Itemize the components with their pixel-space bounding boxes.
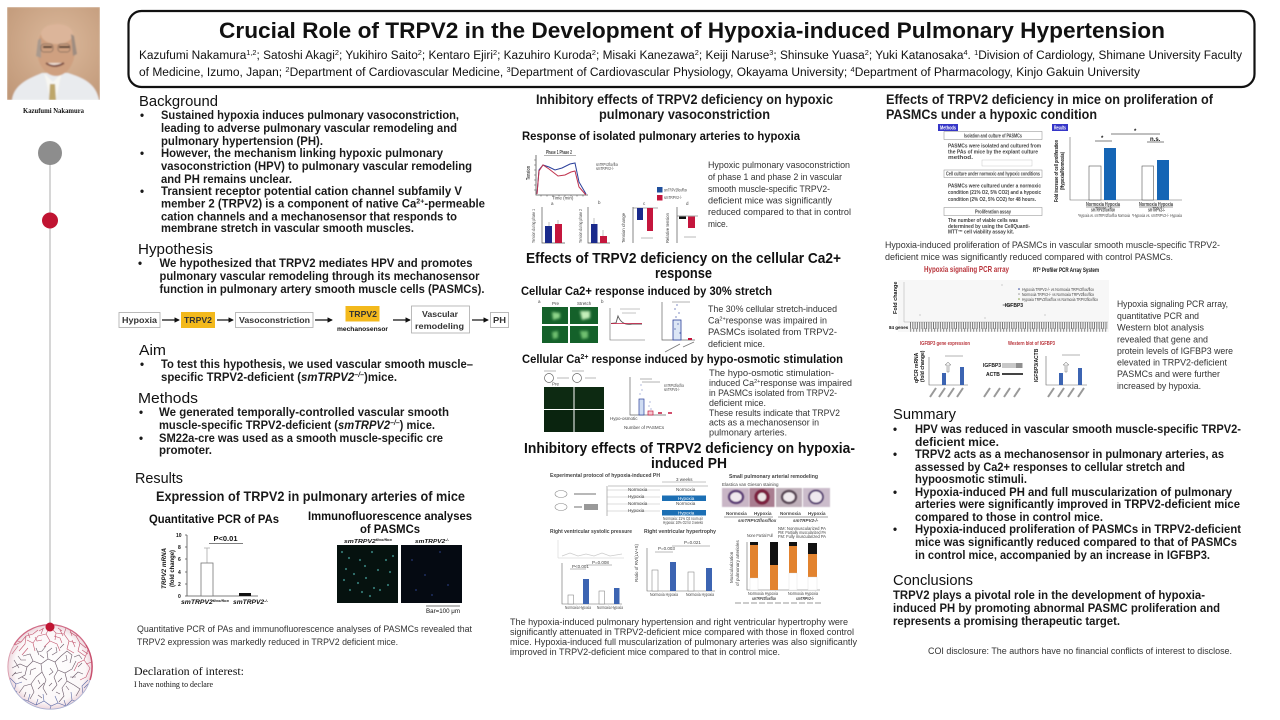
micrographs: small pulmonary arterial remodeling	[722, 474, 830, 523]
bar chart: right ventricular systolic pressure: Right ventricular systolic pressure	[550, 529, 632, 535]
experimental protocol: Experimental protocol of hypoxia-induced PH	[550, 473, 660, 479]
timeline line	[49, 160, 51, 626]
heading: response	[655, 265, 712, 282]
aim text: To test this hypothesis, we used vascular smooth muscle–	[161, 358, 474, 371]
experimental protocol: Hypoxia	[678, 510, 695, 516]
bar chart: TRPV2 mRNA: 10	[176, 533, 182, 539]
summary bullets: hypoosmotic stimuli.	[915, 473, 1027, 486]
heading: results: Results	[135, 470, 183, 487]
methods box: PASMCs were isolated and cultured from	[948, 144, 1042, 150]
summary bullets: deficient mice.	[915, 436, 999, 449]
methods box: Proliferation assay	[975, 210, 1011, 216]
hypothesis text: We hypothesized that TRPV2 mediates HPV and promotes	[160, 257, 472, 270]
methods text: We generated temporally-controlled vascular smooth	[159, 406, 449, 419]
bar chart: TRPV2 mRNA: TRPV2 mRNA	[161, 548, 168, 589]
panel: effects on the cellular Ca2+ response	[521, 250, 852, 438]
bar chart: hypo-osmotic: Hypo-osmotic	[610, 416, 638, 421]
description: hypo-osmotic: in PASMCs isolated from TRPV2-	[709, 387, 837, 398]
bar chart: proliferation: smTRPV2flox/flox	[1091, 208, 1115, 214]
panel: background	[139, 93, 486, 235]
flow diagram: hypoxia to PH: Vascular	[422, 309, 459, 319]
methods box: Methods	[940, 126, 956, 132]
heading: Effects of TRPV2 deficiency on the cellular Ca2+	[526, 250, 841, 267]
panel: effects on proliferation of PASMCs	[885, 92, 1220, 262]
heading: Inhibitory effects of TRPV2 deficiency on hypoxia-	[524, 440, 855, 457]
summary bullets: TRPV2 acts as a mechanosensor in pulmonary arteries, as	[915, 448, 1224, 461]
western blot of IGFBP3: ACTB	[986, 372, 1000, 378]
PCR array plot	[889, 280, 1109, 332]
bar chart: proliferation	[1052, 124, 1182, 218]
summary bullets: in control mice, accompanied by an increase in IGFBP3.	[915, 549, 1210, 562]
micrographs: small pulmonary arterial remodeling: Hypoxia	[808, 511, 826, 516]
background bullets: •	[140, 147, 144, 160]
bar chart: right ventricular hypertrophy: Right ventricular hypertrophy	[644, 529, 716, 535]
bar chart: TRPV2 mRNA: 0	[178, 594, 181, 600]
illustration: pulmonary vascular sphere	[8, 622, 92, 709]
subheading: expression: Expression of TRPV2 in pulmonary arteries of mice	[156, 489, 465, 504]
methods text: SM22a-cre was used as a smooth muscle-specific cre	[159, 432, 444, 445]
background bullets: vasoconstriction (HPV) to pulmonary vascular remodeling	[161, 160, 472, 173]
aim text: •	[140, 358, 144, 371]
summary bullets: arteries were significantly improved in TRPV2-deficient mice	[915, 498, 1241, 511]
flow diagram: hypoxia to PH: Hypoxia	[122, 315, 157, 325]
legend	[657, 187, 687, 200]
stacked bar chart: muscularization: smTRPV2-/-	[796, 596, 814, 601]
summary bullets: assessed by Ca2+ responses to cellular stretch and	[915, 461, 1185, 474]
description: hypo-osmotic: deficient mice.	[709, 397, 766, 408]
legend: smTRPV2-/-	[664, 195, 682, 200]
experimental protocol: Hypoxia	[628, 494, 645, 499]
description: protein levels of IGFBP3 were	[1117, 345, 1233, 356]
bar chart: IGFBP3 protein: IGFBP3/ACTB	[1034, 348, 1040, 382]
line chart: stretch trace	[601, 299, 645, 340]
heading: background: Background	[139, 93, 218, 110]
declaration of interest: Declaration of interest:	[134, 664, 244, 678]
methods box: The number of viable cells was	[948, 218, 1018, 224]
western blot of IGFBP3: Western blot of IGFBP3	[1008, 341, 1055, 347]
bar chart: TRPV2 mRNA: 4	[178, 570, 181, 576]
heading: pulmonary vasoconstriction	[599, 107, 770, 122]
summary bullets: HPV was reduced in vascular smooth muscle-specific TRPV2-	[915, 423, 1241, 436]
bar chart: right ventricular hypertrophy: Normoxia Hypoxia	[650, 592, 678, 597]
bar chart: IGFBP3 gene expression: (fold change)	[920, 350, 926, 382]
description: Western blot analysis	[1117, 322, 1204, 332]
description: of phase 1 and phase 2 in vascular	[708, 171, 842, 182]
line chart: vessel tension: Time (min)	[552, 196, 574, 200]
caption: mice. Hypoxia-induced full muscularization of pulmonary arteries was also significantly	[510, 636, 857, 647]
description: hypo-osmotic	[709, 367, 852, 438]
description: stretch	[708, 303, 837, 349]
line chart: vessel tension: smTRPV2flox/flox	[596, 162, 618, 167]
declaration of interest: I have nothing to declare	[134, 679, 213, 689]
authors and affiliations	[139, 49, 1242, 79]
stacked bar chart: muscularization: Normoxia Hypoxia	[788, 591, 818, 596]
methods box: the PAs of mice by the explant culture	[948, 150, 1038, 156]
caption	[510, 616, 857, 657]
methods text	[139, 406, 449, 457]
heading	[526, 250, 841, 282]
authors and affiliations: of Medicine, Izumo, Japan; 2Department of Cardiovascular Medicine, 3Department of Cardiovascular Physiology, Okayama University; 4Department of Pharmacology, Kinjo Gakuin University	[139, 66, 1140, 79]
western blot of IGFBP3: IGFBP3	[983, 363, 1001, 369]
summary bullets: mice was significantly reduced compared to that of PASMCs	[915, 536, 1237, 549]
description: hypo-osmotic: These results indicate that TRPV2	[709, 407, 840, 418]
title banner	[128, 11, 1254, 87]
heading: methods: Methods	[138, 390, 198, 407]
bar chart: right ventricular systolic pressure: P<0.001	[572, 564, 589, 569]
bar charts: phase 1 and phase 2: d	[686, 201, 689, 206]
summary bullets: •	[893, 448, 897, 461]
subheading: immunofluorescence: of PASMCs	[360, 524, 420, 536]
COI disclosure: COI disclosure: The authors have no financial conflicts of interest to disclose.	[928, 645, 1232, 656]
bar chart: proliferation: Normoxia Hypoxia	[1086, 202, 1120, 208]
bar chart: hypo-osmotic: Number of PASMCs	[624, 425, 665, 430]
bar chart: proliferation: *	[1134, 129, 1137, 135]
caption	[885, 239, 1220, 262]
micrographs: small pulmonary arterial remodeling: Normoxia	[780, 511, 801, 516]
bar chart: TRPV2 mRNA: 2	[178, 582, 181, 588]
line chart: vessel tension: Phase 1 Phase 2	[546, 150, 572, 156]
bar chart: right ventricular systolic pressure	[550, 529, 632, 610]
methods box: MTT™ cell viability assay kit.	[948, 230, 1015, 236]
panel: conclusions	[893, 572, 1220, 628]
bar chart: right ventricular hypertrophy: Ratio of RV/(LV+S)	[634, 544, 639, 582]
subheading: stretch: Cellular Ca2+ response induced by 30% stretch	[521, 284, 772, 298]
bar chart: stretch	[662, 302, 695, 352]
bar charts: phase 1 and phase 2: Tension change	[621, 213, 626, 243]
micrographs: small pulmonary arterial remodeling: Small pulmonary arterial remodeling	[729, 474, 818, 480]
bar charts: phase 1 and phase 2	[531, 200, 698, 243]
panel: results, TRPV2 expression	[135, 470, 472, 647]
experimental protocol	[550, 473, 708, 525]
PCR array plot: Fold change	[893, 282, 899, 314]
methods box: method.	[948, 155, 974, 161]
description: stretch: Ca2+response was impaired in	[708, 314, 827, 326]
timeline marker: grey	[38, 141, 62, 165]
experimental protocol: Normoxia	[676, 501, 696, 506]
background bullets: Transient receptor potential cation channel subfamily V	[161, 185, 462, 198]
aim text	[140, 358, 474, 384]
micrographs: small pulmonary arterial remodeling: smTRPV2-/-	[793, 518, 819, 523]
PCR array plot: IGFBP3	[1005, 303, 1023, 309]
description: elevated in TRPV2-deficient	[1117, 356, 1227, 368]
description: smooth muscle-specific TRPV2-	[708, 183, 830, 194]
bar charts: phase 1 and phase 2: Tension during phase 1	[531, 209, 536, 243]
heading	[886, 92, 1213, 122]
line chart: vessel tension: smTRPV2-/-	[596, 166, 614, 171]
line chart: vessel tension: Tension	[526, 166, 532, 180]
summary bullets: •	[893, 523, 897, 536]
caption: improved in TRPV2-deficient mice compared to that in control mice.	[510, 646, 780, 657]
scale bar: Bar=100 μm	[426, 609, 460, 615]
summary bullets: •	[893, 486, 897, 499]
background bullets: cation channels and a mechanosensor that responds to	[161, 210, 457, 224]
experimental protocol: 3 weeks	[676, 477, 693, 482]
authors and affiliations: Kazufumi Nakamura 1,2; Satoshi Akagi 2; Yukihiro Saito 2; Kentaro Ejiri 2; Kazuhiro Kuroda 2; Misaki Kanezawa 2; Keiji Naruse 3; Shinsuke Yuasa 2; Yuki Katanosaka 4. 1Division of Cardiology, Shimane University Faculty	[139, 49, 1242, 62]
bar chart: right ventricular systolic pressure: Normoxia Hypoxia	[565, 605, 591, 610]
methods text: promoter.	[159, 444, 212, 457]
background bullets: •	[140, 185, 144, 198]
caption: Hypoxia-induced proliferation of PASMCs in vascular smooth muscle-specific TRPV2-	[885, 239, 1220, 250]
PCR array plot: Hypoxia TRPV2-/- vs Normoxia TRPV2flox/flox	[1022, 287, 1095, 292]
experimental protocol: Normoxia: 21% O2 room air	[663, 516, 703, 521]
bar chart: hypo-osmotic: smTRPV2flox/flox	[664, 383, 684, 388]
bar chart: hypo-osmotic: smTRPV2-/-	[664, 387, 680, 392]
conclusions text: TRPV2 plays a pivotal role in the development of hypoxia-	[893, 589, 1205, 602]
description: stretch: The 30% cellular stretch-induced	[708, 303, 837, 314]
line chart: vessel tension	[526, 150, 618, 200]
flow diagram: hypoxia to PH: TRPV2	[349, 309, 377, 319]
description: stretch: deficient mice.	[708, 338, 765, 349]
flow diagram: hypoxia to PH: Vasoconstriction	[239, 315, 310, 325]
stacked bar chart: muscularization: Muscularization	[729, 551, 734, 583]
heading: Inhibitory effects of TRPV2 deficiency on hypoxic	[536, 92, 833, 107]
conclusions text	[893, 589, 1220, 628]
caption: expression: Quantitative PCR of PAs and immunofluorescence analyses of PASMCs revealed that	[137, 623, 472, 634]
methods text: •	[139, 406, 143, 419]
stacked bar chart: muscularization: PM: Partially muscularized PA	[778, 530, 826, 535]
subheading: hypo-osmotic: Cellular Ca2+ response induced by hypo-osmotic stimulation	[522, 352, 843, 366]
description: mice.	[708, 218, 728, 229]
fluorescence micrographs: smTRPV2 flox/flox	[344, 538, 393, 545]
experimental protocol: Normoxia	[676, 487, 696, 492]
background bullets	[140, 109, 486, 235]
description: increased by hypoxia.	[1117, 380, 1201, 391]
stacked bar chart: muscularization: FM: Fully muscularized PA	[778, 534, 826, 539]
summary bullets: Hypoxia-induced proliferation of PASMCs in TRPV2-deficient	[915, 523, 1241, 536]
timeline marker: red	[42, 212, 58, 228]
heading	[524, 440, 855, 472]
heading: PASMCs under a hypoxic condition	[886, 107, 1097, 122]
micrographs: stretch	[538, 299, 598, 343]
methods box: Cell culture under normoxic and hypoxic conditions	[946, 172, 1040, 178]
background bullets: However, the mechanism linking hypoxic pulmonary	[161, 147, 444, 160]
description	[1117, 298, 1233, 391]
bar charts: phase 1 and phase 2: c	[643, 201, 646, 206]
bar chart: TRPV2 mRNA: P<0.01	[214, 536, 238, 543]
presenter photo	[7, 7, 100, 100]
methods box: condition (2% O2, 5% CO2) for 48 hours.	[948, 197, 1037, 203]
fluorescence micrographs: smTRPV2 -/-	[415, 538, 450, 545]
description: stretch: PASMCs isolated from TRPV2-	[708, 326, 837, 337]
description: hypo-osmotic: induced Ca2+response was impaired	[709, 377, 852, 388]
western blot of IGFBP3	[983, 341, 1055, 397]
bar chart: TRPV2 mRNA	[161, 533, 269, 606]
bar charts: phase 1 and phase 2: a	[551, 201, 554, 206]
bar chart: IGFBP3 gene expression	[914, 341, 970, 397]
description: hypo-osmotic: pulmonary arteries.	[709, 426, 787, 438]
heading: aim: Aim	[139, 342, 166, 359]
micrographs: small pulmonary arterial remodeling: Hypoxia	[754, 511, 772, 516]
bar chart: proliferation: smTRPV2-/-	[1148, 208, 1165, 214]
micrographs: stretch: Pre	[552, 301, 560, 306]
bar chart: right ventricular systolic pressure: P=0.008	[592, 560, 609, 565]
description: quantitative PCR and	[1117, 310, 1199, 321]
bar chart: proliferation: *Hypoxia vs. smTRPV2-/- Hypoxia	[1132, 213, 1182, 218]
methods box: condition (21% O2, 5% CO2) and a hypoxic	[948, 190, 1041, 196]
panel: inhibitory effects on hypoxia-induced PH	[510, 440, 857, 657]
bar chart: right ventricular systolic pressure: Normoxia Hypoxia	[597, 605, 623, 610]
hypothesis text: •	[138, 257, 142, 270]
bar chart: proliferation: (Hypoxia/Normoxia)	[1060, 152, 1066, 190]
bar chart: hypo-osmotic	[610, 377, 684, 430]
fluorescence micrographs	[337, 538, 462, 603]
bar chart: TRPV2 mRNA: smTRPV2 flox/flox	[181, 599, 230, 606]
summary bullets: compared to those in control mice.	[915, 511, 1103, 524]
flow diagram: hypoxia to PH	[119, 306, 508, 333]
methods box: PASMCs were cultured under a normoxic	[948, 184, 1041, 190]
micrographs: small pulmonary arterial remodeling: Normoxia	[726, 511, 747, 516]
panel: inhibitory effects on hypoxic vasoconstriction	[522, 92, 851, 243]
panel: methods	[138, 390, 449, 457]
description: hypo-osmotic: The hypo-osmotic stimulation-	[709, 367, 834, 378]
PCR array heading: Hypoxia signaling PCR array	[924, 264, 1009, 274]
stacked bar chart: muscularization: NM: Nonmuscularized PA	[778, 526, 826, 531]
hypothesis text: pulmonary vascular remodeling through its mechanosensor	[160, 270, 480, 283]
stacked bar chart: muscularization: None Partial Full	[747, 533, 773, 538]
description: PASMCs and were further	[1117, 368, 1220, 379]
panel: hypoxia signaling PCR array	[889, 264, 1233, 397]
micrographs: small pulmonary arterial remodeling: Elastica van Gieson staining	[722, 482, 779, 487]
bar chart: proliferation: Fold increase of cell proliferation	[1054, 140, 1060, 202]
subheading: immunofluorescence: Immunofluorescence analyses	[308, 511, 472, 523]
flow diagram: hypoxia to PH: PH	[493, 315, 506, 325]
caption: expression	[137, 623, 472, 647]
description: deficient mice was significantly	[708, 194, 832, 206]
bar chart: proliferation: Normoxia Hypoxia	[1139, 202, 1173, 208]
background bullets: Sustained hypoxia induces pulmonary vasoconstriction,	[161, 109, 459, 122]
conclusions text: represents a promising therapeutic target.	[893, 615, 1120, 628]
panel: aim	[139, 342, 474, 384]
background bullets: pulmonary hypertension (PH).	[161, 135, 323, 148]
panel: summary	[893, 406, 1241, 562]
heading: summary: Summary	[893, 406, 956, 423]
aim text: specific TRPV2-deficient (smTRPV2–/–)mice.	[161, 370, 397, 384]
PCR array plot: Normoxia TRPV2-/- vs Normoxia TRPV2flox/flox	[1022, 292, 1095, 297]
bar chart: proliferation: *Hypoxia vs. smTRPV2flox/flox Normoxia	[1078, 213, 1130, 218]
background bullets: leading to adverse pulmonary vascular remodeling and	[161, 122, 457, 135]
micrographs: stretch: Stretch	[577, 301, 592, 306]
panel: hypothesis	[138, 241, 484, 296]
methods box	[938, 124, 1042, 236]
background bullets: membrane stretch in vascular smooth muscles.	[161, 222, 414, 235]
methods text: •	[139, 432, 143, 445]
description: Hypoxic pulmonary vasoconstriction	[708, 159, 850, 170]
subheading: quantitative PCR: Quantitative PCR of PAs	[149, 514, 279, 526]
flow diagram: hypoxia to PH: TRPV2	[184, 315, 212, 325]
background bullets: member 2 (TRPV2) is a component of native Ca2+-permeable	[161, 196, 486, 210]
experimental protocol: Hypoxia	[628, 508, 645, 513]
stacked bar chart: muscularization: of pulmonary arterioles	[735, 539, 740, 586]
experimental protocol: Hypoxia: 10% O2 for 3 weeks	[663, 520, 704, 525]
description	[708, 159, 851, 229]
bar charts: phase 1 and phase 2: b	[598, 200, 601, 205]
bar chart: IGFBP3 gene expression: IGFBP3 gene expression	[920, 341, 970, 347]
bar chart: right ventricular hypertrophy: P=0.021	[684, 540, 701, 545]
subheading: immunofluorescence	[308, 511, 472, 536]
experimental protocol: Normoxia	[628, 487, 648, 492]
heading: conclusions: Conclusions	[893, 572, 973, 589]
heading: induced PH	[651, 455, 727, 472]
bar chart: IGFBP3 gene expression: qPCR mRNA	[914, 352, 920, 383]
hypothesis text: function in pulmonary artery smooth muscle cells (PASMCs).	[160, 283, 484, 296]
background bullets: and PH remains unclear.	[161, 173, 292, 186]
flow diagram: hypoxia to PH: remodeling	[415, 321, 464, 331]
heading	[536, 92, 833, 122]
heading: Effects of TRPV2 deficiency in mice on proliferation of	[886, 92, 1213, 107]
hypothesis text	[138, 257, 484, 296]
summary bullets: •	[893, 423, 897, 436]
bar charts: phase 1 and phase 2: Relative tension	[665, 213, 670, 243]
bar chart: IGFBP3 protein	[1034, 348, 1087, 397]
line chart: stretch trace: b	[601, 299, 604, 304]
scale bar	[426, 606, 460, 615]
caption: significantly attenuated in TRPV2-deficient mice compared with those in floxed control	[510, 626, 854, 637]
background bullets: •	[140, 109, 144, 122]
caption: expression: TRPV2 expression was markedly reduced in TRPV2 deficient mice.	[137, 636, 398, 647]
bar chart: TRPV2 mRNA: 8	[178, 545, 181, 551]
subheading: Response of isolated pulmonary arteries to hypoxia	[522, 129, 800, 143]
experimental protocol: Hypoxia	[678, 496, 695, 501]
caption: The hypoxia-induced pulmonary hypertension and right ventricular hypertrophy were	[510, 616, 848, 627]
methods box: determined by using the CellQuanti-	[948, 224, 1030, 230]
summary bullets	[893, 423, 1241, 562]
stacked bar chart: muscularization: Normoxia Hypoxia	[748, 591, 778, 596]
bar chart: right ventricular hypertrophy: P=0.003	[658, 546, 675, 551]
title: Crucial Role of TRPV2 in the Development of Hypoxia-induced Pulmonary Hypertension	[219, 18, 1165, 43]
bar charts: phase 1 and phase 2: Tension during phase 2	[578, 209, 583, 243]
conclusions text: induced PH by promoting abnormal PASMC proliferation and	[893, 602, 1220, 615]
methods box: Isolation and culture of PASMCs	[964, 134, 1022, 140]
PCR array plot: 84 genes	[889, 325, 909, 330]
stacked bar chart: muscularization: smTRPV2flox/flox	[752, 596, 776, 601]
PCR array plot: Hypoxia TRPV2flox/flox vs Normoxia TRPV2flox/flox	[1022, 297, 1099, 302]
bar chart: right ventricular hypertrophy	[634, 529, 716, 597]
schematic and micrographs: hypo-osmotic: Pre	[552, 382, 560, 386]
heading: hypothesis: Hypothesis	[138, 241, 213, 258]
experimental protocol: Normoxia	[628, 501, 648, 506]
bar chart: proliferation: Results	[1054, 126, 1066, 132]
bar chart: proliferation: *	[1101, 136, 1104, 142]
legend: smTRPV2flox/flox	[664, 188, 687, 192]
micrographs: small pulmonary arterial remodeling: smTRPV2flox/flox	[738, 518, 777, 523]
declaration of interest	[134, 664, 244, 689]
bar chart: right ventricular hypertrophy: Normoxia Hypoxia	[686, 592, 714, 597]
description: reduced compared to that in control	[708, 206, 851, 217]
caption: deficient mice was significantly reduced compared with control PASMCs.	[885, 251, 1173, 262]
schematic and micrographs: hypo-osmotic	[544, 371, 604, 432]
bar chart: TRPV2 mRNA: smTRPV2 -/-	[233, 599, 269, 606]
bar chart: proliferation: n.s.	[1150, 137, 1161, 143]
bar chart: TRPV2 mRNA: (fold change)	[170, 550, 176, 587]
description: revealed that gene and	[1117, 334, 1208, 344]
description: hypo-osmotic: acts as a mechanosensor in	[709, 416, 819, 428]
flow diagram: hypoxia to PH: mechanosensor	[337, 327, 389, 333]
summary bullets: Hypoxia-induced PH and full muscularization of pulmonary	[915, 486, 1233, 499]
description: Hypoxia signaling PCR array,	[1117, 298, 1228, 309]
bar chart: TRPV2 mRNA: 6	[178, 557, 181, 563]
methods text: muscle-specific TRPV2-deficient (smTRPV2–/–) mice.	[159, 418, 435, 432]
PCR array system label: RT² Profiler PCR Array System	[1033, 267, 1099, 274]
micrographs: stretch: a	[538, 299, 541, 304]
presenter name: Kazufumi Nakamura	[23, 108, 85, 115]
stacked bar chart: muscularization	[729, 526, 826, 603]
